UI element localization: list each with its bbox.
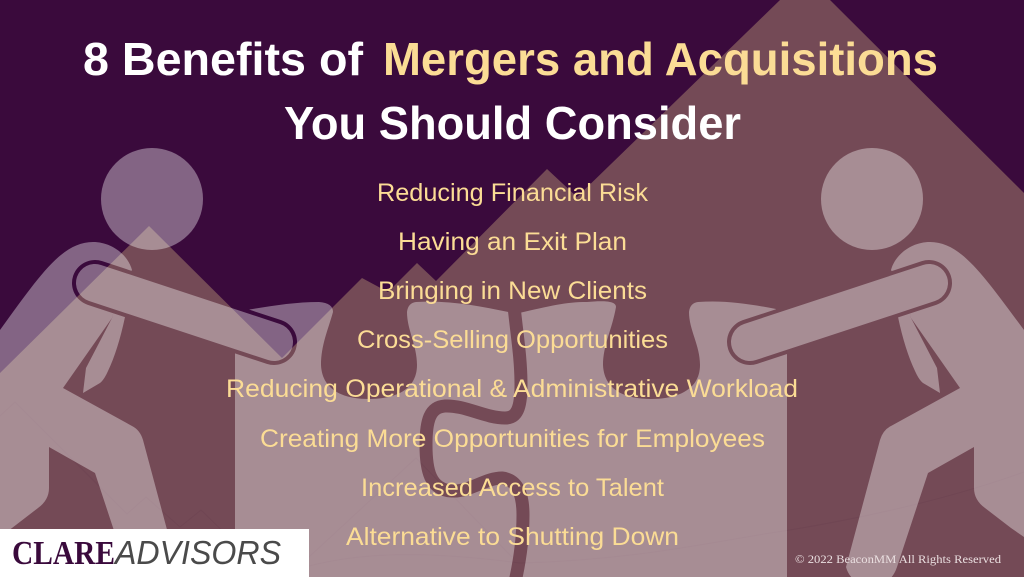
benefit 2: Having an Exit Plan [398,228,627,256]
logo word ADVISORS: ADVISORS [113,534,281,571]
faint chart lines [0,402,1024,566]
benefit 3: Bringing in New Clients [378,277,647,305]
title line 1 white: 8 Benefits of [83,33,364,85]
logo background [0,529,309,577]
bodies and puzzle pieces [0,242,1024,577]
benefit 4: Cross-Selling Opportunities [357,326,668,354]
benefit 5: Reducing Operational & Administrative Workload [226,375,798,403]
right figure arm [750,283,929,342]
title line 2: You Should Consider [284,97,741,149]
benefit 1: Reducing Financial Risk [377,179,648,207]
puzzle pieces [235,301,787,577]
left figure arm [95,283,274,342]
title [83,33,938,149]
benefits list [226,179,798,551]
logo [0,529,309,577]
benefit 7: Increased Access to Talent [361,474,664,502]
left figure body [0,242,167,529]
title line 1 highlight: Mergers and Acquisitions [383,33,938,85]
right figure head [821,148,923,250]
copyright: © 2022 BeaconMM All Rights Reserved [795,554,1001,566]
right figure body [846,242,1024,577]
left figure head [101,148,203,250]
figures and puzzle [0,148,1024,577]
benefit 6: Creating More Opportunities for Employees [260,425,765,453]
logo word CLARE: CLARE [12,535,115,572]
benefit 8: Alternative to Shutting Down [346,523,679,551]
left figure tie [83,313,125,393]
right figure tie [898,314,940,393]
